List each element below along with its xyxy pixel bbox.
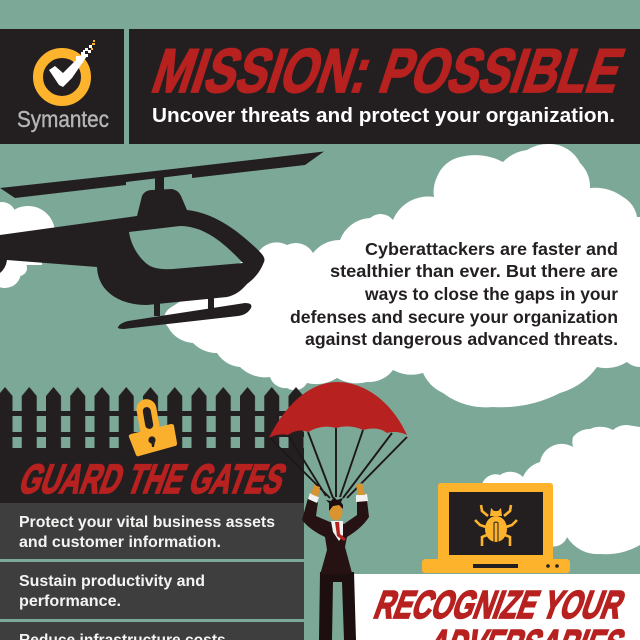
cuffs bbox=[308, 493, 368, 503]
row 1: Protect your vital business assets bbox=[19, 514, 275, 531]
intro text: stealthier than ever. But there are bbox=[330, 261, 618, 281]
skid bbox=[118, 303, 251, 329]
panel: logo bbox=[0, 29, 124, 144]
row 2: Sustain productivity and bbox=[19, 573, 205, 590]
tie bbox=[335, 522, 346, 541]
row 3 bbox=[0, 622, 304, 640]
businessman bbox=[302, 483, 369, 640]
icon: bug bbox=[475, 505, 517, 546]
hands bbox=[311, 483, 365, 497]
brand name: Symantec bbox=[17, 106, 109, 132]
row 2: performance. bbox=[19, 593, 121, 610]
skid struts bbox=[154, 296, 214, 316]
row 1 bbox=[0, 503, 304, 559]
mast bbox=[155, 175, 164, 193]
trousers bbox=[319, 572, 356, 640]
heading: GUARD THE GATES bbox=[14, 456, 292, 502]
intro text: Cyberattackers are faster and bbox=[365, 239, 618, 259]
hair bbox=[326, 497, 343, 511]
row 2 bbox=[0, 562, 304, 619]
icon: laptop bbox=[422, 483, 570, 573]
shirt bbox=[331, 521, 343, 541]
fuselage bbox=[0, 189, 264, 305]
canopy bbox=[269, 382, 407, 438]
helicopter bbox=[0, 152, 324, 329]
panel: guard the gates bbox=[0, 387, 304, 640]
cloud: left bbox=[0, 202, 55, 288]
intro text: against dangerous advanced threats. bbox=[305, 329, 618, 349]
head bbox=[330, 504, 342, 520]
intro text bbox=[290, 239, 618, 349]
suspension lines bbox=[270, 428, 407, 498]
parachute bbox=[269, 382, 407, 498]
panel: recognize your adversaries bbox=[352, 574, 640, 640]
rotor bbox=[0, 152, 324, 198]
row 1: and customer information. bbox=[19, 534, 221, 551]
icon: padlock bbox=[129, 398, 177, 456]
panel: title banner bbox=[129, 29, 640, 144]
cloud: lower right bbox=[470, 425, 640, 554]
intro text: ways to close the gaps in your bbox=[364, 284, 618, 304]
fence bbox=[0, 387, 304, 504]
jacket and arms bbox=[302, 498, 369, 575]
intro text: defenses and secure your organization bbox=[290, 307, 618, 327]
icon: Symantec check ring bbox=[38, 40, 95, 101]
subtitle: Uncover threats and protect your organization. bbox=[152, 105, 615, 127]
cloud: main bbox=[164, 144, 640, 407]
